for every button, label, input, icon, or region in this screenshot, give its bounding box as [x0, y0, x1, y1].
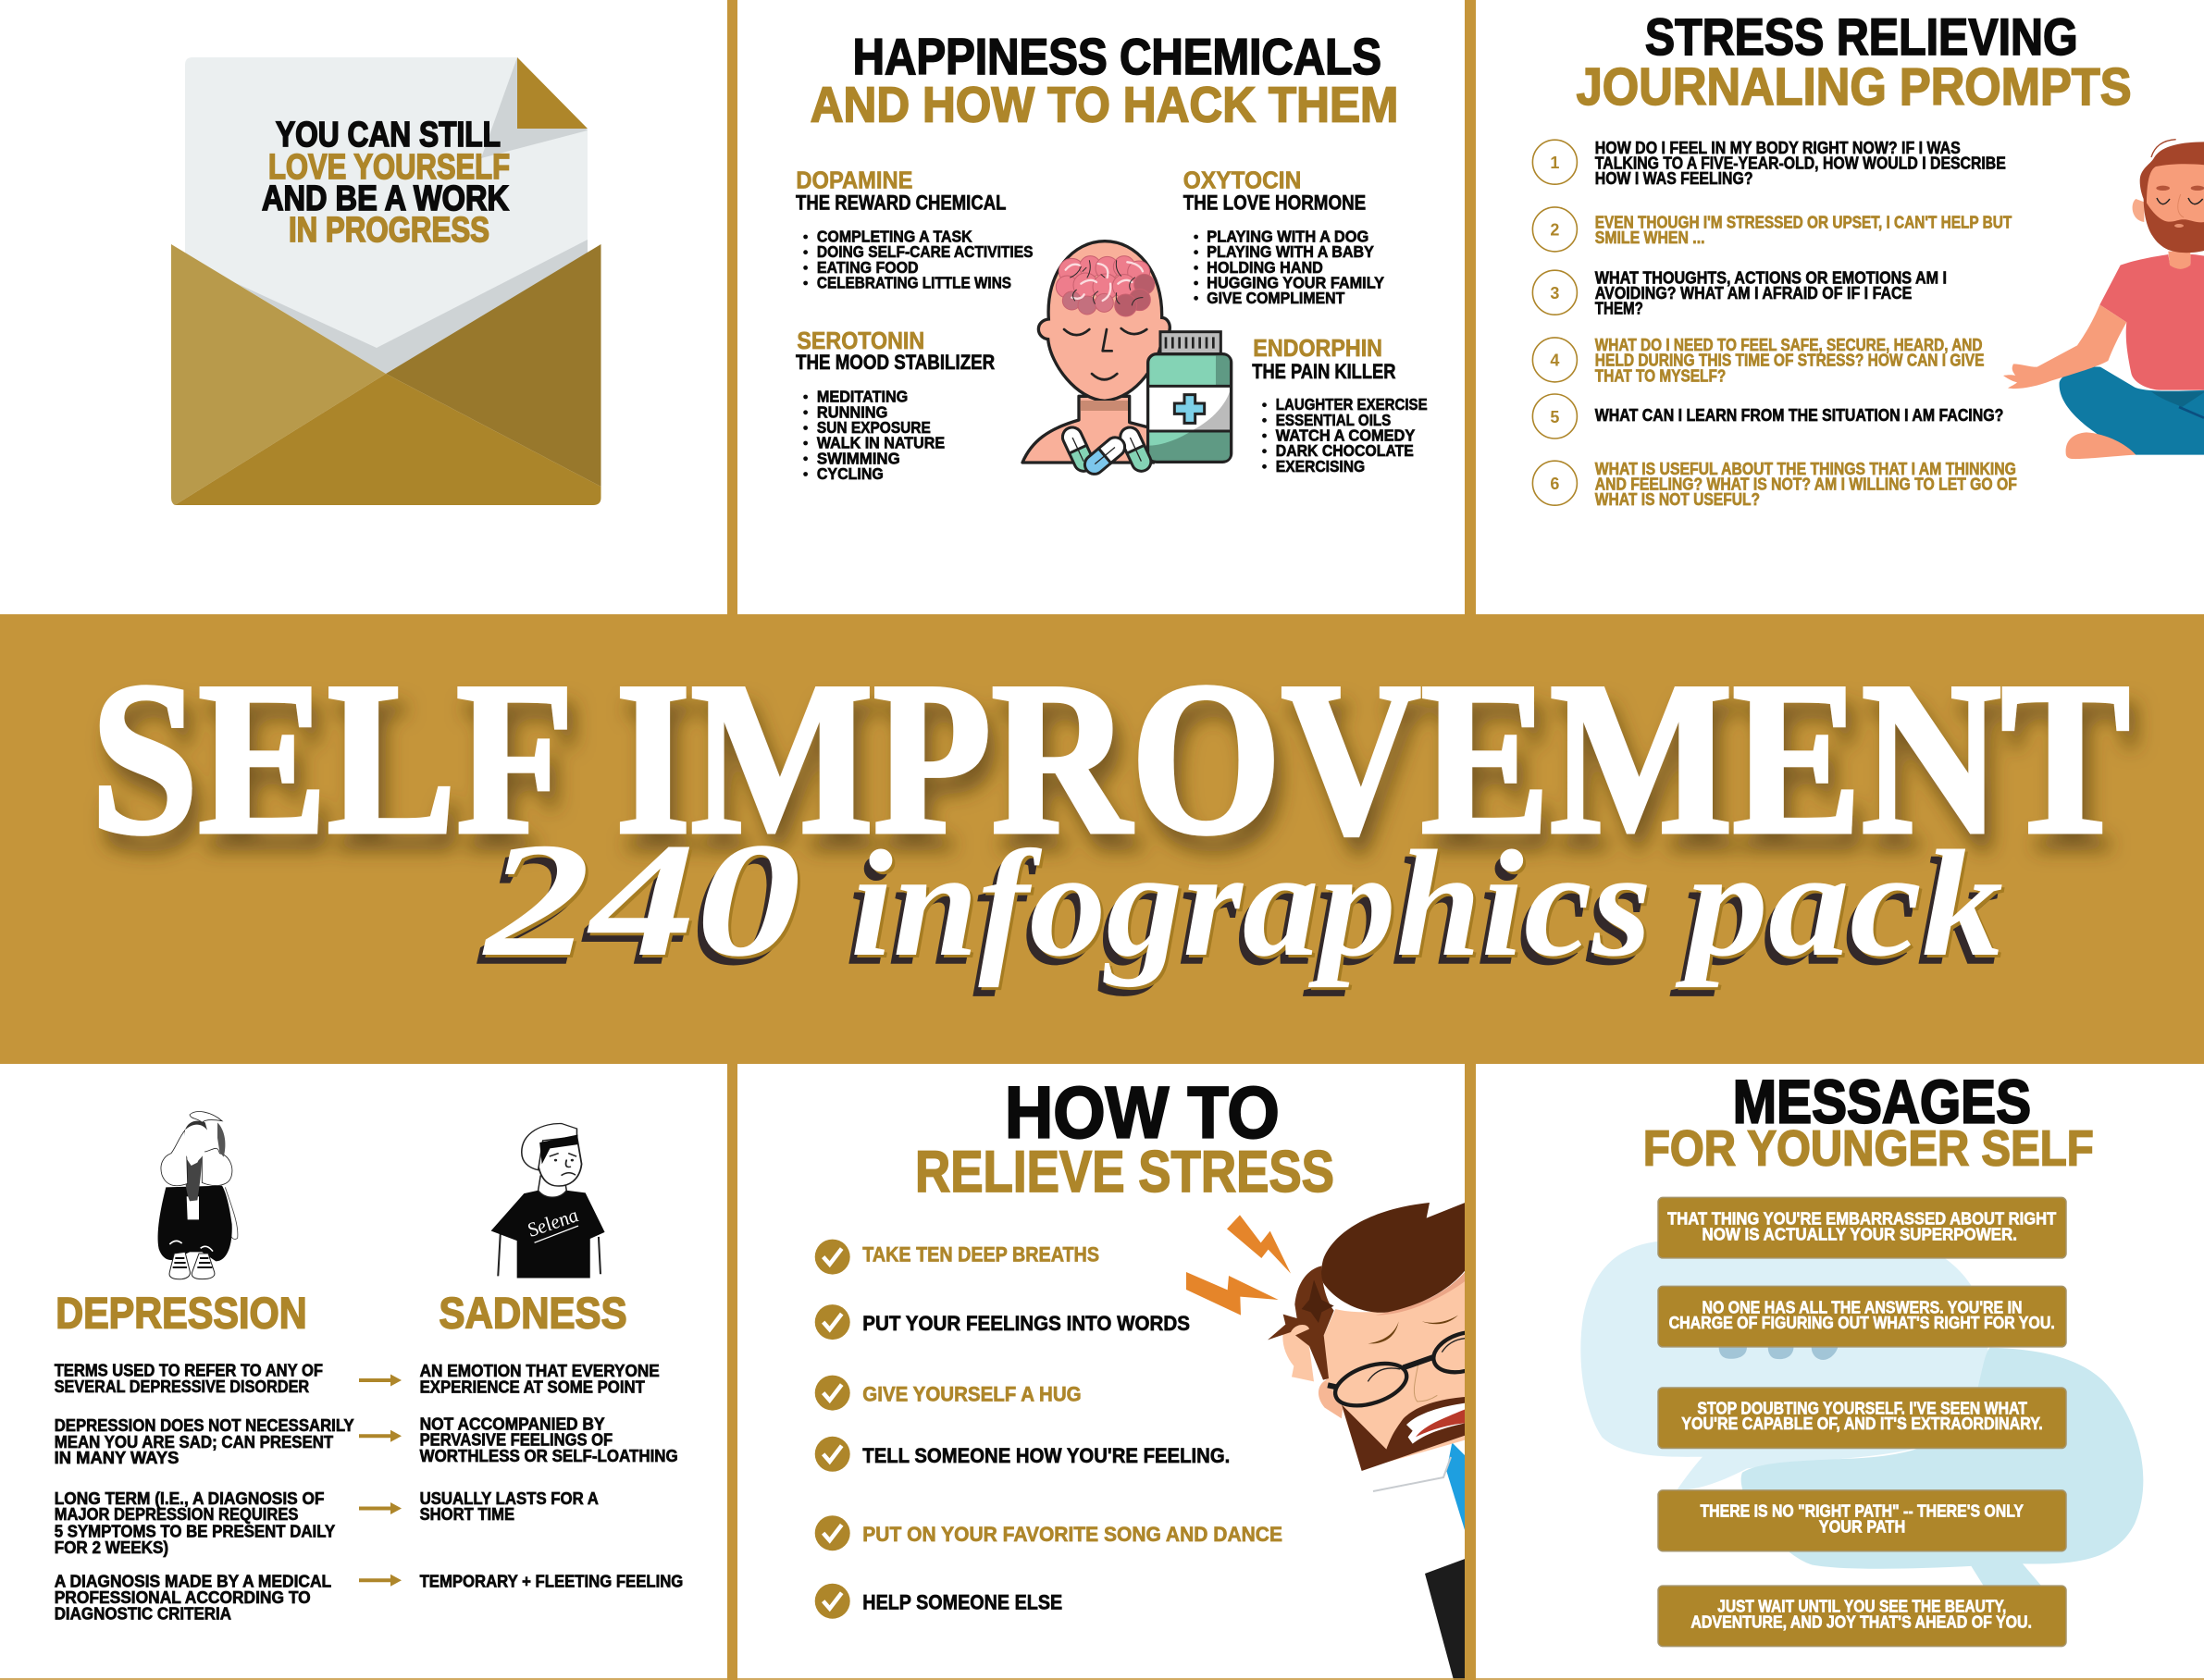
title: RELIEVE STRESS: [915, 1140, 1334, 1204]
central banner: [0, 614, 2204, 1064]
prompts: AVOIDING? WHAT AM I AFRAID OF IF I FACE: [1595, 284, 1912, 303]
circle numbers: 5: [1550, 408, 1559, 426]
column headings: DEPRESSION: [56, 1290, 307, 1338]
sadness text: EXPERIENCE AT SOME POINT: [420, 1378, 645, 1397]
arrows: [359, 1375, 402, 1587]
illustration: meditating man: [2003, 140, 2204, 459]
prompts: THEM?: [1595, 300, 1643, 318]
sadness text: PERVASIVE FEELINGS OF: [420, 1430, 613, 1449]
depression text: FOR 2 WEEKS): [55, 1538, 168, 1557]
title: [811, 29, 1398, 133]
serotonin block: CYCLING: [817, 464, 884, 483]
panel: happiness chemicals: [796, 29, 1428, 483]
prompts: SMILE WHEN ...: [1595, 229, 1704, 247]
depression text: PROFESSIONAL ACCORDING TO: [55, 1588, 311, 1607]
banner subtitle: pack: [1678, 821, 2006, 991]
column headings: [56, 1290, 627, 1338]
oxytocin block: HUGGING YOUR FAMILY: [1207, 274, 1384, 292]
panel: how to relieve stress: [815, 1070, 1499, 1680]
banner subtitle: 240: [484, 812, 804, 994]
message box 1: [1658, 1197, 2066, 1258]
oxytocin block: OXYTOCIN: [1183, 167, 1301, 193]
checklist text: HELP SOMEONE ELSE: [862, 1591, 1062, 1614]
title: [915, 1070, 1334, 1204]
sadness text: AN EMOTION THAT EVERYONE: [420, 1362, 660, 1380]
dopamine block: THE REWARD CHEMICAL: [796, 191, 1006, 215]
circle numbers: [1550, 154, 1559, 493]
endorphin block: ESSENTIAL OILS: [1276, 411, 1391, 429]
dopamine block: DOPAMINE: [796, 167, 912, 193]
sadness text: [420, 1362, 683, 1590]
face: [1064, 328, 1146, 379]
sadness text: WORTHLESS OR SELF-LOATHING: [420, 1447, 678, 1465]
title: FOR YOUNGER SELF: [1643, 1121, 2094, 1177]
panel: messages for younger self: [1580, 1068, 2143, 1647]
illustration: head, brain, bottle, pills: [1022, 241, 1232, 478]
message box 5: JUST WAIT UNTIL YOU SEE THE BEAUTY,: [1717, 1598, 2006, 1616]
quote text: AND BE A WORK: [262, 179, 509, 218]
prompts: WHAT IS USEFUL ABOUT THE THINGS THAT I AM THINKING: [1595, 460, 2016, 478]
checklist text: GIVE YOURSELF A HUG: [862, 1382, 1082, 1406]
circle numbers: 4: [1550, 352, 1559, 370]
banner subtitle: pack: [1670, 827, 1999, 996]
title: MESSAGES: [1733, 1068, 2031, 1136]
panel: envelope quote: [171, 57, 601, 505]
circle numbers: 1: [1550, 154, 1559, 172]
depression text: DIAGNOSTIC CRITERIA: [55, 1604, 231, 1623]
oxytocin block: [1183, 167, 1384, 307]
depression text: TERMS USED TO REFER TO ANY OF: [55, 1362, 323, 1380]
banner subtitle: [477, 809, 2006, 999]
serotonin block: MEDITATING: [817, 388, 908, 406]
quote text: [262, 116, 510, 250]
oxytocin block: PLAYING WITH A DOG: [1207, 228, 1368, 246]
checklist text: TAKE TEN DEEP BREATHS: [862, 1243, 1099, 1266]
sadness text: TEMPORARY + FLEETING FEELING: [420, 1572, 683, 1590]
checklist text: TELL SOMEONE HOW YOU'RE FEELING.: [862, 1444, 1230, 1467]
title: JOURNALING PROMPTS: [1577, 57, 2132, 117]
message box 2: NO ONE HAS ALL THE ANSWERS. YOU'RE IN: [1703, 1298, 2023, 1316]
endorphin block: ENDORPHIN: [1253, 336, 1382, 362]
endorphin block: [1252, 336, 1428, 476]
message box 5: ADVENTURE, AND JOY THAT'S AHEAD OF YOU.: [1690, 1613, 2032, 1632]
endorphin block: DARK CHOCOLATE: [1276, 441, 1414, 460]
message box 1: NOW IS ACTUALLY YOUR SUPERPOWER.: [1703, 1225, 2017, 1243]
depression text: [55, 1362, 354, 1623]
bottle: [1160, 332, 1220, 354]
banner subtitle: infographics: [850, 819, 1652, 988]
numbered circles: [1532, 140, 1577, 505]
message box 4: THERE IS NO "RIGHT PATH" -- THERE'S ONLY: [1701, 1501, 2024, 1520]
message box 3: [1658, 1388, 2066, 1449]
message box 5: [1658, 1586, 2066, 1647]
banner subtitle: infographics: [846, 827, 1647, 996]
depression text: LONG TERM (I.E., A DIAGNOSIS OF: [55, 1489, 325, 1508]
checklist text: PUT ON YOUR FAVORITE SONG AND DANCE: [862, 1523, 1282, 1546]
banner subtitle: 240: [477, 818, 797, 999]
title: HAPPINESS CHEMICALS: [853, 29, 1381, 85]
checklist text: PUT YOUR FEELINGS INTO WORDS: [862, 1312, 1190, 1335]
depression text: SEVERAL DEPRESSIVE DISORDER: [55, 1377, 309, 1396]
prompts: THAT TO MYSELF?: [1595, 366, 1726, 385]
sadness text: NOT ACCOMPANIED BY: [420, 1415, 605, 1434]
prompts: WHAT DO I NEED TO FEEL SAFE, SECURE, HEARD, AND: [1595, 336, 1982, 354]
prompts: HELD DURING THIS TIME OF STRESS? HOW CAN I GIVE: [1595, 352, 1984, 370]
sadness text: SHORT TIME: [420, 1505, 514, 1524]
column headings: SADNESS: [439, 1290, 627, 1338]
message box 2: [1658, 1286, 2066, 1347]
depression text: IN MANY WAYS: [55, 1449, 179, 1467]
illustration: sad boy in black shirt: [491, 1124, 605, 1279]
message box 4: [1658, 1490, 2066, 1551]
title: [1577, 7, 2132, 117]
oxytocin block: HOLDING HAND: [1207, 258, 1323, 277]
serotonin block: SUN EXPOSURE: [817, 418, 931, 437]
banner subtitle: 240: [481, 809, 801, 991]
prompts: HOW I WAS FEELING?: [1595, 169, 1752, 188]
brain: [1056, 256, 1155, 316]
oxytocin block: GIVE COMPLIMENT: [1207, 289, 1345, 307]
depression text: A DIAGNOSIS MADE BY A MEDICAL: [55, 1572, 331, 1590]
illustration: sad boy in black shirt: Selena: [524, 1204, 582, 1241]
oxytocin block: THE LOVE HORMONE: [1183, 191, 1366, 215]
check icons: [815, 1240, 850, 1619]
message box 1: THAT THING YOU'RE EMBARRASSED ABOUT RIGHT: [1667, 1209, 2056, 1228]
pills: [1059, 425, 1154, 478]
circle numbers: 3: [1550, 284, 1559, 303]
endorphin block: WATCH A COMEDY: [1276, 426, 1416, 444]
paper letter: [185, 57, 588, 374]
depression text: MEAN YOU ARE SAD; CAN PRESENT: [55, 1433, 333, 1451]
serotonin block: SWIMMING: [817, 449, 900, 467]
circle numbers: 6: [1550, 475, 1559, 493]
dopamine block: [796, 167, 1033, 292]
speech bubbles background: [1580, 1241, 2143, 1588]
message box 4: YOUR PATH: [1819, 1517, 1905, 1536]
prompts: EVEN THOUGH I'M STRESSED OR UPSET, I CAN'T HELP BUT: [1595, 214, 2012, 232]
dopamine block: EATING FOOD: [817, 258, 919, 277]
serotonin block: [796, 328, 995, 483]
sadness text: USUALLY LASTS FOR A: [420, 1489, 599, 1508]
serotonin block: THE MOOD STABILIZER: [796, 351, 995, 374]
dopamine block: COMPLETING A TASK: [817, 228, 972, 246]
quote text: YOU CAN STILL: [276, 116, 501, 154]
illustration: stressed man: [1186, 1203, 1465, 1680]
title: STRESS RELIEVING: [1645, 7, 2078, 66]
prompts: WHAT CAN I LEARN FROM THE SITUATION I AM FACING?: [1595, 406, 2003, 425]
serotonin block: SEROTONIN: [797, 328, 924, 354]
message box 2: CHARGE OF FIGURING OUT WHAT'S RIGHT FOR YOU.: [1669, 1314, 2055, 1332]
prompts: [1595, 139, 2017, 509]
endorphin block: EXERCISING: [1276, 457, 1365, 476]
depression text: MAJOR DEPRESSION REQUIRES: [55, 1505, 298, 1524]
prompts: HOW DO I FEEL IN MY BODY RIGHT NOW? IF I WAS: [1595, 139, 1961, 157]
message box 3: YOU'RE CAPABLE OF, AND IT'S EXTRAORDINARY.: [1681, 1414, 2043, 1433]
title: [1643, 1068, 2094, 1177]
illustration: woman hugging knees: [158, 1112, 238, 1279]
depression text: DEPRESSION DOES NOT NECESSARILY: [55, 1416, 354, 1435]
serotonin block: WALK IN NATURE: [817, 434, 945, 452]
quote text: IN PROGRESS: [289, 211, 489, 250]
circle numbers: 2: [1550, 221, 1559, 240]
prompts: WHAT THOUGHTS, ACTIONS OR EMOTIONS AM I: [1595, 268, 1947, 287]
prompts: AND FEELING? WHAT IS NOT? AM I WILLING TO LET GO OF: [1595, 476, 2017, 494]
panel: depression vs sadness: [55, 1112, 683, 1623]
endorphin block: THE PAIN KILLER: [1252, 360, 1395, 383]
serotonin block: RUNNING: [817, 402, 887, 421]
depression text: 5 SYMPTOMS TO BE PRESENT DAILY: [55, 1523, 335, 1541]
title: AND HOW TO HACK THEM: [811, 78, 1398, 133]
dopamine block: CELEBRATING LITTLE WINS: [817, 274, 1011, 292]
title: HOW TO: [1005, 1070, 1280, 1153]
banner subtitle: pack: [1675, 819, 2003, 988]
oxytocin block: PLAYING WITH A BABY: [1207, 242, 1374, 261]
message box 3: STOP DOUBTING YOURSELF. I'VE SEEN WHAT: [1697, 1399, 2027, 1417]
banner subtitle: infographics: [853, 821, 1654, 991]
dopamine block: DOING SELF-CARE ACTIVITIES: [817, 242, 1033, 261]
endorphin block: LAUGHTER EXERCISE: [1276, 395, 1428, 414]
envelope: [171, 244, 601, 505]
quote text: LOVE YOURSELF: [268, 148, 510, 187]
panel: journaling prompts: [1532, 7, 2204, 509]
checklist text: [862, 1243, 1282, 1614]
prompts: WHAT IS NOT USEFUL?: [1595, 490, 1760, 509]
prompts: TALKING TO A FIVE-YEAR-OLD, HOW WOULD I DESCRIBE: [1595, 154, 2006, 172]
